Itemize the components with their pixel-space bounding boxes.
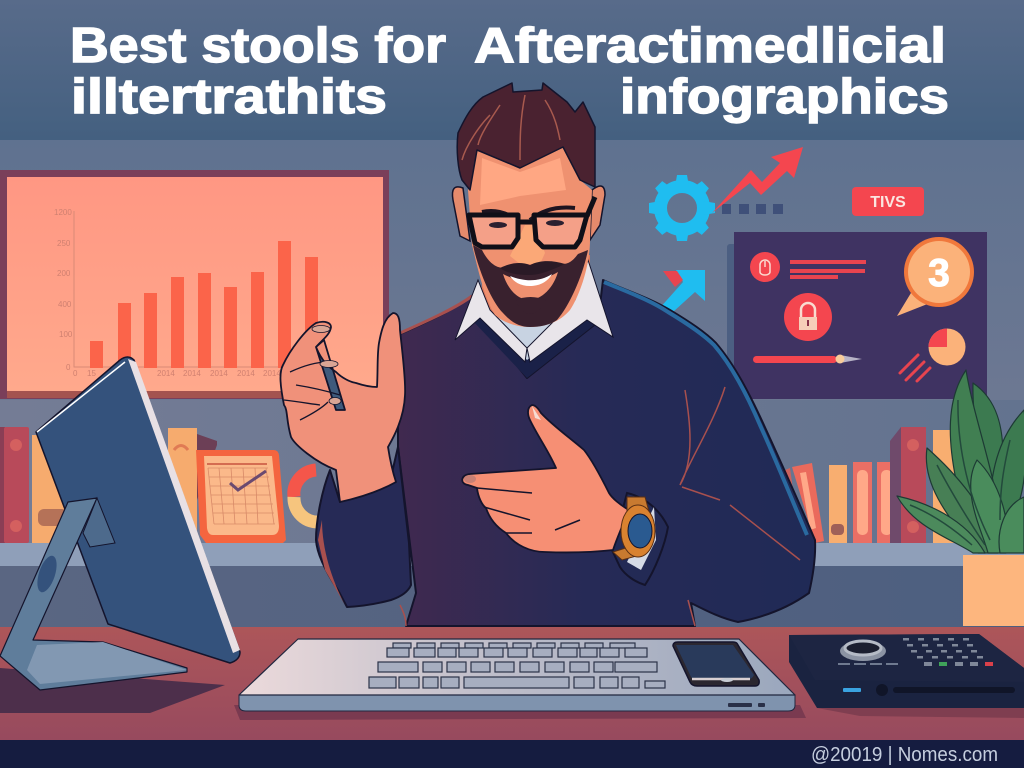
device keypad (903, 638, 993, 666)
monitor back (36, 357, 240, 663)
books right (780, 427, 957, 543)
chart axis labels: 0 (73, 369, 78, 378)
chart axis labels: 400 (58, 300, 72, 309)
monitor top highlight (37, 362, 125, 432)
device button (876, 684, 888, 696)
keyboard top (239, 639, 795, 695)
hair strands (462, 95, 560, 160)
keys (369, 643, 665, 688)
keyboard ports (728, 703, 752, 707)
stand base plate (27, 642, 187, 684)
badge: TIVS: TIVS (870, 194, 906, 211)
sweater red edge (398, 296, 472, 334)
slider (753, 354, 862, 364)
dotted squares (722, 204, 783, 214)
chart axis labels: 15 (87, 369, 96, 378)
shirt cuff (627, 507, 656, 570)
icon: lock (784, 293, 832, 341)
eyes (489, 220, 564, 228)
title: Best stools for (70, 19, 446, 73)
plant (897, 370, 1024, 553)
footer text: @20019 | Nomes.com (811, 744, 998, 766)
chart axis labels: 1200 (54, 208, 72, 217)
icon: calendar (196, 450, 286, 543)
icon: gear (649, 175, 715, 241)
monitor edge (128, 359, 240, 653)
lower wall below shelf (0, 566, 1024, 628)
lower wall (0, 400, 1024, 545)
callout: speech bubble 3: 3 (928, 252, 950, 295)
ear right (590, 186, 605, 240)
ear left (452, 187, 470, 241)
right sleeve cuff (612, 493, 668, 585)
phone (673, 642, 759, 686)
chart axis labels (54, 208, 281, 378)
device slot (893, 687, 1015, 693)
chart axis labels: 2014 (263, 369, 281, 378)
eyebrows (482, 208, 575, 220)
title band background (0, 0, 1024, 140)
text lines (790, 260, 866, 279)
watch (613, 497, 655, 560)
keyboard side (239, 695, 795, 711)
face (468, 147, 592, 327)
left sleeve (316, 447, 411, 607)
monitor (0, 357, 240, 690)
collar right (527, 260, 613, 362)
keyboard (234, 639, 806, 720)
callout: speech bubble 3 (897, 237, 974, 316)
footer bar (0, 740, 1024, 768)
device shadow (817, 708, 1024, 718)
chart axis labels: 100 (59, 330, 73, 339)
strikes (900, 355, 930, 381)
books left (0, 427, 217, 543)
left sleeve red fold (318, 520, 345, 605)
arrow: red trend (712, 147, 803, 213)
device knob (840, 641, 886, 661)
panel: dark dashboard (727, 232, 987, 399)
mouth (500, 261, 565, 314)
shirt (483, 300, 600, 365)
panel: bar chart board (0, 170, 389, 399)
neck (480, 255, 590, 360)
chart axis labels: 200 (57, 269, 71, 278)
sleeve folds (400, 387, 800, 626)
arrow: blue up (658, 270, 705, 312)
index nail (464, 475, 476, 483)
icon: red badge (750, 252, 780, 282)
stand (0, 498, 187, 690)
shelf (0, 543, 1024, 566)
chart axis labels: 250 (57, 239, 71, 248)
desk (0, 627, 1024, 740)
hand creases (477, 488, 580, 533)
chart axis labels: 0 (66, 363, 71, 372)
device led (843, 688, 861, 692)
title (70, 19, 949, 124)
beard (473, 245, 588, 327)
left hand (280, 313, 405, 502)
badge: TIVS (852, 187, 924, 216)
thumb nail (532, 406, 541, 420)
title: Afteractimedlicial (474, 19, 946, 73)
chart axis labels: 2014 (183, 369, 201, 378)
v-neck band (472, 315, 598, 378)
sweater body (398, 280, 815, 626)
desk shadow (0, 668, 225, 713)
finger nails (312, 326, 341, 404)
hair (457, 83, 595, 190)
bar chart bars (90, 241, 318, 368)
collar left (455, 280, 527, 362)
stand hole (34, 553, 60, 595)
plant pot (963, 555, 1024, 626)
chart axis labels: 2014 (237, 369, 255, 378)
title: infographics (620, 70, 949, 124)
forehead highlight (480, 158, 566, 205)
keyboard shadow (234, 705, 806, 720)
glasses (469, 197, 595, 247)
title: illtertrathits (71, 70, 387, 124)
stand flap (83, 498, 115, 547)
device label dashes (838, 663, 898, 665)
pen (313, 340, 348, 432)
pointing hand (462, 405, 629, 552)
icon: pie chart (928, 328, 966, 366)
wall background (0, 140, 1024, 410)
man (280, 83, 815, 626)
chart axis labels: 2014 (210, 369, 228, 378)
nose (510, 225, 545, 264)
sweater blue edge (604, 282, 807, 535)
fingers (284, 362, 340, 420)
donut chart (294, 470, 320, 522)
chart axis labels: 2014 (157, 369, 175, 378)
device (789, 634, 1024, 718)
